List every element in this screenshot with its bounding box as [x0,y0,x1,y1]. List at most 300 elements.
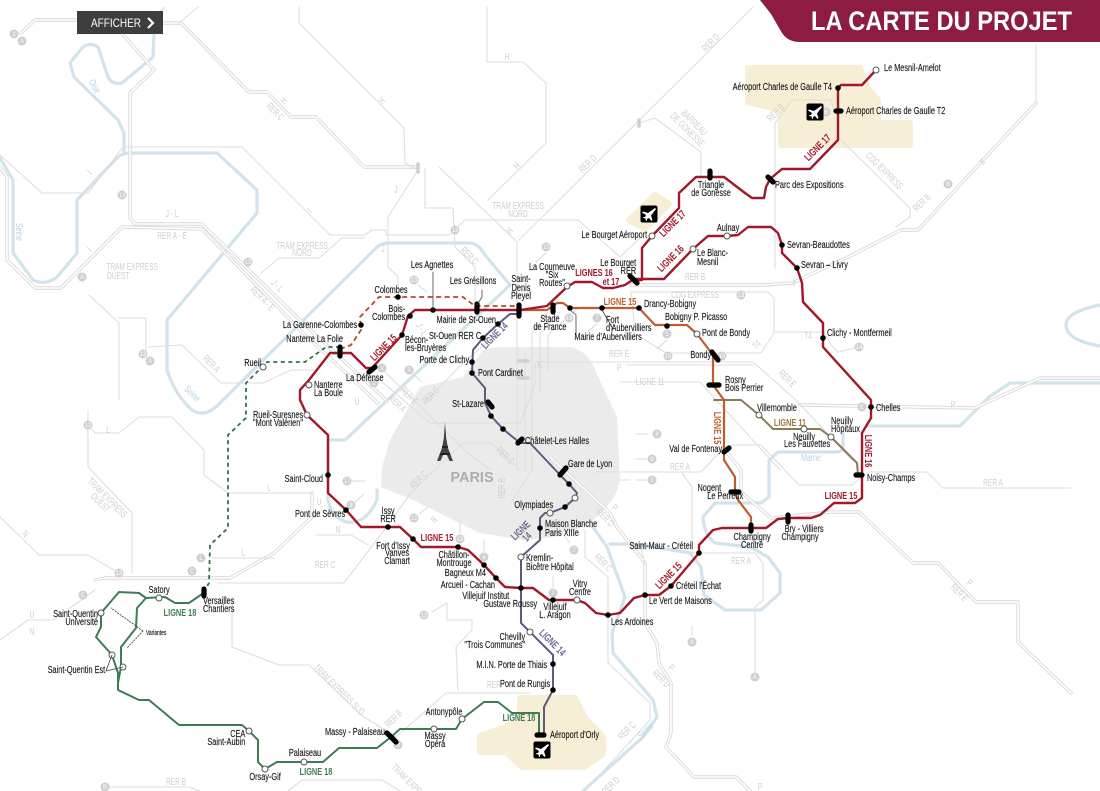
label: Ligne 15 east horizontal: LIGNE 15 [604,296,636,307]
icon: airplane CDG [806,104,824,120]
station: Bois-Colombes: Bois- [388,303,405,314]
network stations: C [81,593,86,599]
network text labels: L [267,482,271,493]
stations [98,67,879,772]
network text labels: RER C [407,468,430,491]
station: Les Grésillons: Les Grésillons [450,275,497,286]
network text labels: N [30,626,34,637]
network stations: 13 [411,278,418,284]
station: CDG T4: Aéroport Charles de Gaulle T4 [733,81,832,92]
network text labels: CDG EXPRESS [863,149,906,192]
label: Ligne 15 vertical: LIGNE 15 [712,412,723,444]
station: Pont de Rungis: Pont de Rungis [500,678,551,689]
station: Saint-Quentin Est: Saint-Quentin Est [48,664,106,675]
network text labels: TRAM EXPRESS [106,261,158,272]
network stations: 13 [738,293,745,299]
station: Saint-Denis Pleyel: Pleyel [511,290,531,301]
icon: airplane Orly [534,742,550,758]
station: Chevilly: "Trois Communes" [464,639,525,650]
station: Orsay-Gif: Orsay-Gif [249,771,281,782]
network text labels: LIGNE 11 [636,376,665,387]
network stations: 13 [85,423,92,429]
label: Ligne 14 south: LIGNE 14 [537,627,568,658]
station: Villemomble: Villemomble [757,402,797,413]
label: Lignes 16 et 17 [575,267,619,287]
station: Kremlin-Bicêtre: Bicêtre Hôpital [526,561,574,572]
station: Le Bourget RER: Le Bourget [600,257,637,268]
label: Ligne 18 Versailles: LIGNE 18 [164,607,196,618]
network stations: 1 [650,478,654,484]
station: La Courneuve: "Six [546,269,559,280]
line: Ligne 16 [520,227,871,475]
line: Ligne 18 [96,592,539,769]
station: Chevilly: Chevilly [499,631,526,642]
network text labels: T4 [750,337,764,351]
label: Ligne 14 north: LIGNE 14 [479,320,510,351]
line: Ligne 15 main [300,310,862,615]
network stations: A [80,275,84,281]
network text labels: RER A [670,461,690,472]
station: Pont de Bondy: Pont de Bondy [702,327,751,338]
label: Ligne 16: LIGNE 16 [655,243,686,274]
network text labels: TRAM EXPRESS [492,200,544,211]
station: Nogent Le Perreux: Le Perreux [707,490,744,501]
network stations: 13 [457,537,464,543]
label: Ligne 15 Créteil: LIGNE 15 [653,560,684,591]
network text labels: TRAM EXPRESS [85,475,130,520]
network text labels: RER C [494,444,517,467]
network stations: 4 [482,555,486,561]
label: Ligne 15 west: LIGNE 15 [368,332,399,363]
station: Le Mesnil-Amelot: Le Mesnil-Amelot [884,62,941,73]
station: Drancy-Bobigny: Drancy-Bobigny [644,298,697,309]
station: Nanterre La Folie: Nanterre La Folie [286,333,343,344]
network stations: 13 [245,260,252,266]
station: Neuilly Les Fauvettes [784,431,831,449]
station: Fort d'Issy [376,540,410,566]
river names: Oise [86,77,104,96]
label: Ligne 15 Noisy: LIGNE 15 [825,490,857,501]
river: Marne [610,433,843,610]
station: Le Bourget RER: RER [621,265,637,276]
station: Fort d'Aubervilliers: d'Aubervilliers [606,322,652,333]
station: La Courneuve: Routes" [539,277,565,288]
network text labels: RER C [592,551,615,574]
network text labels: OUEST [88,490,113,515]
network stations: B [824,110,828,116]
network text labels: H [505,51,509,62]
station: Colombes: Colombes [375,284,408,295]
station: Saint-Maur-Créteil: Saint-Maur - Créteil [629,540,693,551]
network stations: B [946,182,950,188]
airport zones [480,68,910,767]
station: Rueil-Suresnes: "Mont Valérien" [253,417,303,428]
station: Rueil-Suresnes: Rueil-Suresnes [253,409,304,420]
station: Fort d'Issy: Vanves [385,547,409,558]
network text labels: J - L [269,277,286,294]
network text labels: N [20,528,31,539]
network text labels: U [317,496,321,507]
station: Les Ardoines: Les Ardoines [611,616,654,627]
line: Ligne 15 dashed Nanterre to Pleyel [340,297,521,349]
Paris area [381,347,620,540]
network stations: 3 [407,368,411,374]
station: Les Agnettes: Les Agnettes [411,259,454,270]
network text labels: RER D [699,31,722,54]
label: Paris: PARIS [450,470,494,486]
label: Ligne 14 Maison Blanche: LIGNE [509,519,533,543]
station: Villejuif Institut Gustave Roussy: Gustave Roussy [483,598,538,609]
station: Noisy-Champs: Noisy-Champs [867,472,915,483]
network stations: 13 [421,613,428,619]
station: Bagneux M4: Bagneux M4 [445,567,486,578]
title banner [760,0,1100,42]
network text labels: TRAM EXPRESS SUD [311,661,368,718]
label: Ligne 11: LIGNE 11 [774,417,806,428]
network text labels: RER D [576,152,599,175]
station: Olympiades: Olympiades [514,499,554,510]
station: Neuilly Les Fauvettes: Les Fauvettes [784,438,831,449]
network text labels: P [666,662,677,673]
network stations: B [103,785,107,791]
station: Fort d'Issy: Clamart [384,555,410,566]
button: Afficher [77,11,163,34]
line: Ligne 15 east [521,303,751,528]
station: Saint-Cloud: Saint-Cloud [285,473,323,484]
network text labels: T4 [804,330,812,341]
network text labels: NORD [508,208,528,219]
network text labels: K [789,278,800,289]
station: Créteil l'Échat: Créteil l'Échat [676,580,721,591]
grey pills [418,120,639,378]
network stations: 2 [372,381,376,387]
station: Maison Blanche: Maison Blanche [545,518,597,529]
station: Mairie de St-Ouen: Mairie de St-Ouen [436,314,496,325]
network stations: 8 [690,640,694,646]
network text labels: U [30,609,34,620]
network text labels: RER C [419,384,442,407]
network stations: 1 [12,32,16,38]
station: Porte de Clichy: Porte de Clichy [419,354,470,365]
station: CDG T2: Aéroport Charles de Gaulle T2 [846,105,945,116]
network text labels: K [977,156,988,167]
network text labels: H [376,95,387,106]
station: CEA Saint-Aubin: Saint-Aubin [207,736,245,747]
network text labels: RER B [166,776,186,787]
station: Neuilly Les Fauvettes: Neuilly [793,431,815,442]
station: Bry-Villiers-Champigny: Bry - Villiers [785,523,824,534]
network small arrows [352,253,692,635]
network stations: L [199,556,203,562]
network text labels: TRAM EXPRESS [276,240,328,251]
station: Versailles Chantiers: Chantiers [203,603,235,614]
network text labels: RER C [615,719,638,742]
network text labels: RER [487,679,501,690]
station: Bobigny P. Picasso: Bobigny P. Picasso [665,311,727,322]
station: Triangle de Gonesse: Triangle [698,179,724,190]
station: Massy Opéra: Opéra [425,738,446,749]
station: St-Ouen RER C: St-Ouen RER C [429,330,482,341]
station: Saint-Denis Pleyel: Saint- [511,273,531,284]
station: Satory: Satory [148,584,170,595]
network text labels: RER C [458,244,481,267]
station: Maison Blanche: Paris XIIIe [545,527,579,538]
network text labels: RER E [398,384,421,407]
label: Ligne 17 CDG: LIGNE 17 [802,132,833,163]
station: Saint-Quentin Université: Université [65,616,98,627]
network text labels: N [336,524,340,535]
station: Aulnay: Aulnay [717,222,740,233]
label: Ligne 18 Orly: LIGNE 18 [503,712,535,723]
station: Rosny Bois Perrier: Rosny [725,374,746,385]
station: La Défense: La Défense [346,372,384,383]
line: Ligne 11 [714,400,858,475]
network stations: 17 [344,479,351,485]
station labels [48,62,945,782]
zone: Le Bourget [629,195,669,229]
network stations: A [148,359,152,365]
station: Champigny Centre: Champigny [734,531,771,542]
network text labels: P [951,399,956,410]
button: Afficher: AFFICHER [91,16,141,30]
station: Châtillon-Montrouge: Montrouge [436,557,472,568]
network text labels: RER D [594,506,617,529]
station: Le Vert de Maisons: Le Vert de Maisons [649,595,712,606]
network stations: 7 [551,591,555,597]
network text labels: RER C [315,559,335,570]
network stations: 9 [650,457,654,463]
network stations: 13 [116,571,123,577]
network stations: 14 [856,345,863,351]
network stations: 13 [452,228,459,234]
network stations: 5 [665,332,669,338]
station: Sevran-Livry: Sevran – Livry [801,259,848,270]
network text labels: OUEST [107,270,129,281]
station: Arcueil-Cachan: Arcueil - Cachan [441,579,495,590]
station: Rueil: Rueil [244,357,261,368]
network stations: 13 [119,193,126,199]
station: Bécon-les-Bruyères: Bécon- [405,334,428,345]
network text labels: K [538,359,543,370]
icon: chevron [148,18,153,28]
network text labels: P [964,577,975,588]
network text labels: RER A [386,392,409,415]
station: Villejuif Institut Gustave Roussy: Villejuif Institut [462,590,510,601]
station: St-Lazare: St-Lazare [452,398,484,409]
network text labels: RER E [948,581,971,604]
station: Bry-Villiers-Champigny [782,523,824,542]
heading: La carte du projet: LA CARTE DU PROJET [811,6,1072,36]
network text labels: RER B [685,271,705,282]
network text labels: L [106,424,110,435]
station: Neuilly Hôpitaux: Hôpitaux [831,423,860,434]
station: Aéroport d'Orly: Aéroport d'Orly [550,729,599,740]
label: Lignes 16 et 17: et 17 [603,276,619,287]
interchange stations [204,111,862,742]
icon: Eiffel Tower [437,422,453,461]
network text labels: L [241,547,245,558]
network text labels: RER B [910,191,933,214]
network text labels: H [278,95,289,106]
network text labels: N [428,514,439,525]
network stations: 13 [140,352,147,358]
network text labels: RER A [983,477,1003,488]
network text labels: J [381,243,385,254]
network text labels: CDG EXPRESS [671,289,719,300]
station: Le Bourget Aéroport: Le Bourget Aéroport [581,229,648,240]
network text labels: U [355,396,359,407]
network text labels: RER C [264,100,287,123]
network stations: 9 [349,503,353,509]
station: Nogent Le Perreux [697,482,744,501]
station: Massy Opéra: Massy [424,730,446,741]
station: Stade de France: de France [533,321,567,332]
network stations: 13 [566,316,573,322]
network stations: 7 [595,316,599,322]
station: Fort d'Aubervilliers: Fort [606,314,619,325]
network stations: A [753,675,757,681]
station: M.I.N. Porte de Thiais: M.I.N. Porte de Thiais [476,659,548,670]
station: Gare de Lyon: Gare de Lyon [568,458,612,469]
river: Seine south [583,527,657,791]
station: Triangle de Gonesse: de Gonesse [691,187,731,198]
river names: Seine [182,383,203,404]
network text labels: RER A - E [157,230,187,241]
network text labels: J - L [414,321,430,338]
network text labels: RER B [382,707,405,730]
station: Bois-Colombes: Colombes [372,311,406,322]
zone: Charles de Gaulle [748,68,910,145]
network stations: 7 [572,548,576,554]
network text labels: P [609,502,620,513]
station: Fort d'Issy: Fort d'Issy [376,540,410,551]
network stations: 15 [719,354,726,360]
station: La Courneuve: La Courneuve [529,261,575,272]
label: Ligne 15 south: LIGNE 15 [421,532,453,543]
river names: Seine [635,720,656,741]
station: Parc des Expositions: Parc des Expositions [775,179,844,190]
station: Bry-Villiers-Champigny: Champigny [782,531,819,542]
station: Châtelet-Les Halles: Châtelet-Les Halles [525,435,589,446]
network text labels: DE GONESSE [668,110,707,149]
network text labels: RER E [609,348,629,359]
river: Seine [0,153,510,522]
line name labels [164,132,874,777]
river: east arc [1066,305,1100,346]
station: Clichy-Montfermeil: Clichy - Montfermeil [827,327,892,338]
station: Bondy: Bondy [690,349,712,360]
station: Saint-Denis Pleyel: Denis [512,282,531,293]
station: Bécon-les-Bruyères: les-Bruyères [405,342,447,353]
station: Le Blanc-Mesnil: Mesnil [697,256,718,267]
network stations: 8 [655,432,659,438]
station: Nanterre La Boule: Nanterre [314,379,343,390]
network text labels: RER D [650,667,673,690]
icon: airplane Le Bourget [640,206,658,222]
station: Villejuif L. Aragon: L. Aragon [539,609,571,620]
line: Ligne 14 [472,314,577,735]
network stations: C [190,569,195,575]
station: Rosny Bois Perrier: Bois Perrier [725,382,763,393]
river: Marne east [867,383,1100,426]
line: Ligne 17 [634,70,876,280]
station: Val de Fontenay: Val de Fontenay [669,443,723,454]
label: Ligne 16 vertical: LIGNE 16 [863,435,874,467]
label: Lignes 16 et 17: LIGNES 16 [575,267,613,278]
zone: Orly [480,698,603,767]
note: Variantes: Variantes [146,630,166,637]
station: Chelles: Chelles [876,402,901,413]
station: Mairie d'Aubervilliers: Mairie d'Aubervilliers [574,331,642,342]
station: Châtillon-Montrouge: Châtillon- [439,549,469,560]
network text labels: RER A [731,555,751,566]
river names [14,77,821,741]
network stations: A [20,39,24,45]
network text labels: NORD [292,247,312,258]
network text labels: I [85,168,94,177]
leader lines [106,272,612,671]
station: Kremlin-Bicêtre: Kremlin- [526,552,553,563]
network stations: 13 [543,245,550,251]
network text labels: J - L [166,208,179,219]
station: Le Blanc-Mesnil: Le Blanc- [697,247,728,258]
station: Saint-Quentin Université: Saint-Quentin [53,608,98,619]
station: Champigny Centre: Centre [741,539,763,550]
network text labels: P [617,362,622,373]
network text labels: RER A [200,352,223,375]
station: CEA Saint-Aubin: CEA [230,728,246,739]
station: Neuilly Hôpitaux: Neuilly [831,415,853,426]
river names: Marne [801,452,821,463]
station: Versailles Chantiers: Versailles [203,595,235,606]
station: Villejuif Institut Gustave Roussy [462,590,538,609]
station: Nanterre La Boule: La Boule [314,387,343,398]
label: Ligne 18 Palaiseau: LIGNE 18 [300,766,332,777]
network stations: 1 [380,366,384,372]
label: Ligne 14 Maison Blanche: 14 [520,530,534,544]
station: Issy RER: RER [380,513,396,524]
station: Pont de Sèvres: Pont de Sèvres [295,508,346,519]
station: Sevran-Beaudottes: Sevran-Beaudottes [787,239,850,250]
network text labels: H [511,160,522,171]
label: Ligne 17 Bourget: LIGNE 17 [657,208,688,239]
station: Palaiseau: Palaiseau [289,747,321,758]
station: Vitry Centre: Centre [569,586,591,597]
network stations: 12 [411,516,418,522]
station: Villejuif L. Aragon: Villejuif [543,601,567,612]
network text labels: I [305,206,314,215]
station: Pont Cardinet: Pont Cardinet [478,367,523,378]
network text labels: H [504,225,515,236]
network stations: B [396,743,400,749]
network stations: E [860,405,864,411]
station: Nogent Le Perreux: Nogent [697,482,722,493]
network text labels: J [394,184,398,195]
network text labels: RER A - E [248,284,277,313]
network text labels: I [85,245,94,254]
station: La Garenne-Colombes: La Garenne-Colombes [283,319,358,330]
station: Massy-Palaiseau: Massy - Palaiseau [325,726,385,737]
network text labels: RER B [764,101,787,124]
network text labels: BARREAU [679,107,710,138]
river: Oise [70,33,154,153]
river names: Seine [14,223,25,241]
network text labels: RER B [496,478,507,498]
network text labels: RER E [776,367,799,390]
station: Vitry Centre: Vitry [573,578,588,589]
station: Stade de France: Stade [540,313,560,324]
station: Issy RER: Issy [382,505,395,516]
